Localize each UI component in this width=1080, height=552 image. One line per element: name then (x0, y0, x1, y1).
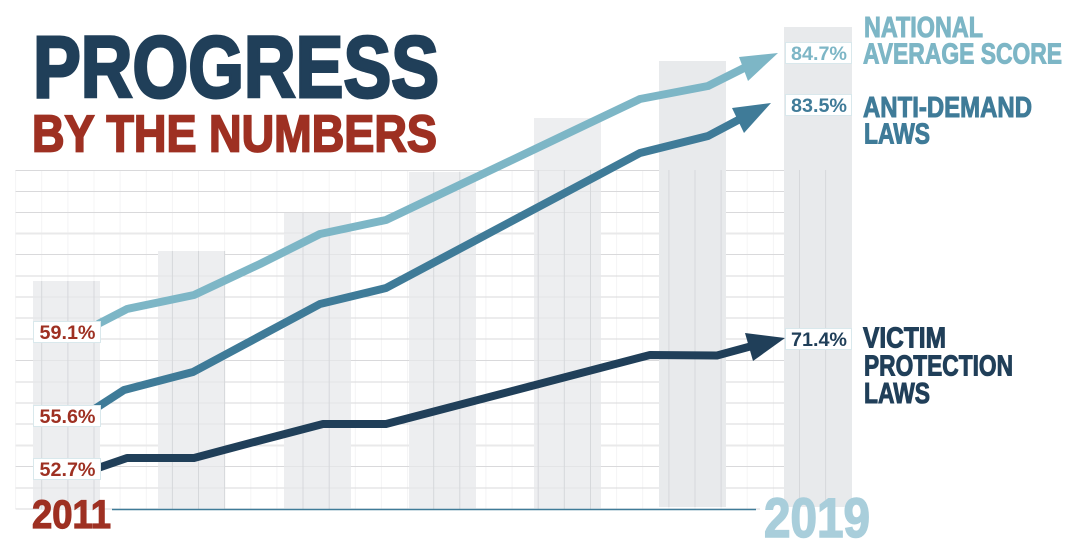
subtitle: BY THE NUMBERS (32, 106, 437, 164)
bar: 2015 (534, 118, 601, 509)
value label: national average 2019: 84.7% (791, 43, 847, 65)
start year: 2011 (32, 493, 111, 537)
line with arrow: national average score (98, 53, 778, 324)
end year: 2019 (764, 486, 870, 549)
value label: anti-demand 2019: 83.5% (791, 95, 847, 117)
legend: victim protection laws: PROTECTION (864, 350, 1013, 382)
bar: 2016 (659, 61, 726, 507)
bar: 2012 (158, 251, 225, 509)
bar: 2019 (784, 27, 852, 507)
legend: victim protection laws: VICTIM (863, 322, 946, 354)
value label: anti-demand 2011: 55.6% (40, 406, 96, 428)
bar: 2014 (409, 172, 476, 509)
value label: national average 2011: 59.1% (40, 322, 96, 344)
legend: national average score (863, 12, 1062, 70)
bar: 2011 (33, 281, 100, 509)
value label: victim protection 2019: 71.4% (791, 329, 847, 351)
line with arrow: anti-demand laws (90, 103, 771, 412)
bar: 2013 (284, 213, 351, 509)
legend: anti-demand laws: ANTI-DEMAND (863, 92, 1032, 124)
legend: national average score: NATIONAL (864, 12, 983, 44)
baseline axis (112, 508, 756, 510)
title: PROGRESS (33, 19, 439, 116)
legend: anti-demand laws (863, 92, 1032, 150)
line with arrow: victim protection laws (98, 333, 785, 468)
legend: victim protection laws: LAWS (864, 378, 930, 410)
value label: victim protection 2011: 52.7% (40, 459, 96, 481)
legend: anti-demand laws: LAWS (864, 118, 930, 150)
legend: victim protection laws (863, 322, 1013, 410)
